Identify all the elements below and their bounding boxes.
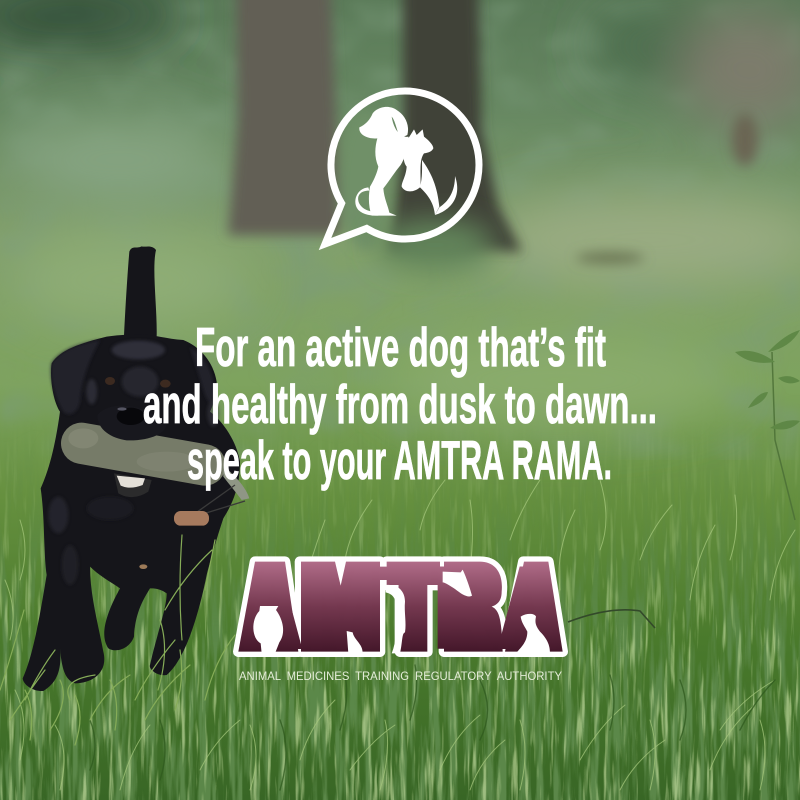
AMTRA logo <box>238 541 563 683</box>
fallen branch <box>568 610 655 628</box>
logo tagline: ANIMAL MEDICINES TRAINING REGULATORY AUTHORITY <box>239 669 562 683</box>
dummy tip and cords <box>223 465 249 500</box>
cat silhouette <box>402 129 433 191</box>
logo animal silhouettes <box>253 570 550 653</box>
background photo: grass texture <box>0 472 800 800</box>
dog tail <box>355 187 378 216</box>
dog tail <box>124 246 157 336</box>
sheep <box>253 606 283 653</box>
cat tail <box>435 176 457 215</box>
horse leg <box>386 585 406 653</box>
headline <box>143 316 657 491</box>
logo letter blocks <box>238 562 563 652</box>
bubble outline <box>325 91 479 244</box>
dog <box>516 614 550 653</box>
mouth with teeth <box>114 473 152 497</box>
dog fur sheen and face shading <box>48 340 219 585</box>
black labrador carrying training dummy <box>23 246 249 691</box>
dog muzzle and nose <box>97 406 167 440</box>
plant on right edge <box>735 330 800 520</box>
dog silhouette <box>359 107 410 216</box>
dog body <box>23 334 240 691</box>
horse head <box>443 570 472 597</box>
logo wordmark: AMTRA <box>241 541 559 675</box>
grass blades behind dog <box>5 480 795 790</box>
cat haunch <box>420 160 439 215</box>
training dummy <box>68 428 205 472</box>
logo white outline <box>238 562 563 652</box>
dog eyes <box>105 377 171 388</box>
grass blades over dog legs <box>0 535 235 745</box>
icon: speech bubble with dog and cat <box>325 91 479 244</box>
cat <box>347 631 363 653</box>
dummy toggle handle <box>174 511 209 526</box>
